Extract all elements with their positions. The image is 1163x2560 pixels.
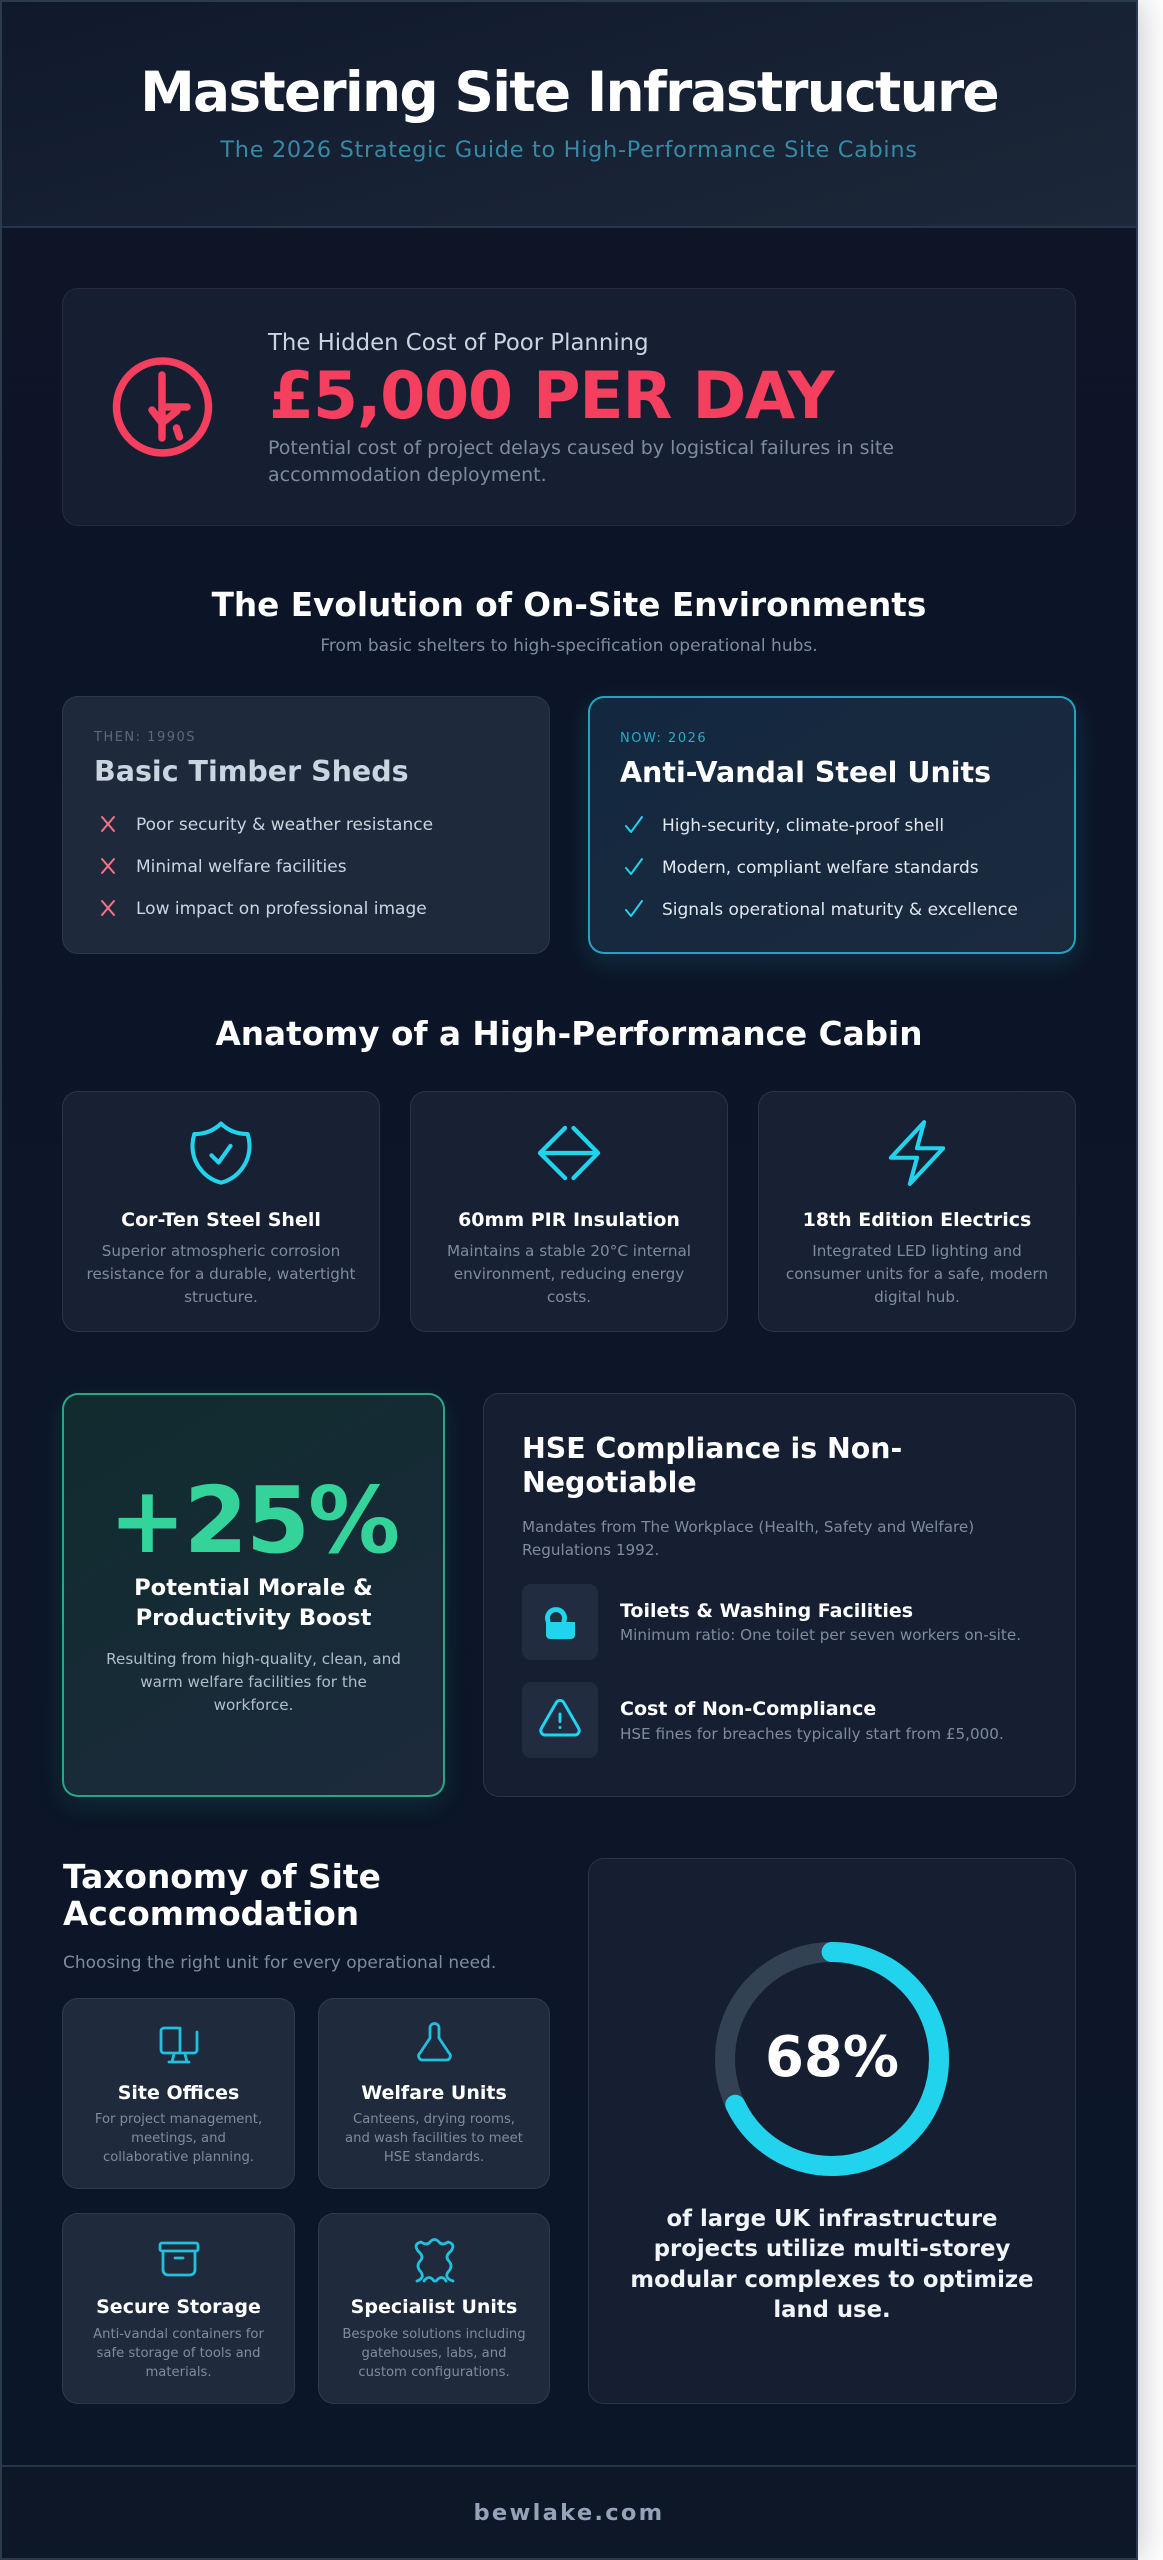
heading: HSE <box>522 1432 902 1499</box>
card text: collaborative planning. <box>103 2150 254 2165</box>
hero description <box>268 436 894 486</box>
card text: Anti-vandal containers for <box>93 2326 264 2342</box>
icon: basin <box>545 1607 575 1639</box>
icon: cross 1 <box>101 816 115 832</box>
heading: timber sheds: Basic Timber Sheds <box>94 755 409 788</box>
heading: taxonomy <box>63 1858 381 1932</box>
panel: multi-storey stat <box>588 1858 1076 2404</box>
panel: steel shell <box>62 1091 380 1332</box>
HSE description: Regulations 1992. <box>522 1540 659 1558</box>
item 3: Signals operational maturity & excellence <box>662 900 1018 920</box>
card text: Integrated LED lighting and <box>812 1242 1022 1260</box>
hero figure: £5,000 PER DAY <box>269 359 833 434</box>
item 1: Poor security & weather resistance <box>136 815 433 835</box>
card text: digital hub. <box>874 1288 960 1306</box>
heading: evolution: The Evolution of On-Site Environments <box>212 586 926 624</box>
card title: 18th Edition Electrics <box>803 1208 1031 1230</box>
HSE description: Mandates from The Workplace (Health, Safety and Welfare) <box>522 1518 974 1536</box>
icon: clock warning <box>112 357 212 457</box>
icon: shield <box>190 1121 252 1185</box>
footer brand: bewlake.com <box>473 2500 664 2526</box>
card text: Canteens, drying rooms, <box>353 2112 515 2127</box>
text: non-compliance title: Cost of Non-Compliance <box>620 1698 876 1720</box>
card: secure storage <box>62 2213 295 2404</box>
heading: anatomy: Anatomy of a High-Performance Cabin <box>215 1015 923 1053</box>
item 2: Modern, compliant welfare standards <box>662 858 979 878</box>
card text: meetings, and <box>131 2131 226 2146</box>
heading: steel units: Anti-Vandal Steel Units <box>620 756 991 788</box>
donut chart <box>715 1942 949 2176</box>
panel: electrics <box>758 1091 1076 1332</box>
card text <box>93 2326 264 2380</box>
card text: Maintains a stable 20°C internal <box>447 1242 691 1260</box>
stat description <box>106 1650 401 1714</box>
text: non-compliance detail: HSE fines for breaches typically start from £5,000. <box>620 1724 1004 1742</box>
card text: safe storage of tools and <box>97 2346 260 2360</box>
icon: storage box <box>158 2242 200 2276</box>
card: site offices <box>62 1998 295 2189</box>
list: now items <box>625 816 1018 920</box>
heading: HSE: HSE Compliance is Non- <box>522 1432 902 1464</box>
title: Mastering Site Infrastructure <box>140 60 998 124</box>
stat caption <box>630 2206 1034 2323</box>
card title: Site Offices <box>118 2082 239 2104</box>
icon: bolt <box>888 1120 946 1186</box>
card text: environment, reducing energy <box>454 1264 684 1282</box>
heading: HSE: Negotiable <box>522 1466 697 1499</box>
header band <box>2 2 1136 228</box>
stat caption: modular complexes to optimize <box>630 2266 1034 2292</box>
icon: check 1 <box>625 816 643 833</box>
card title: Cor-Ten Steel Shell <box>121 1208 321 1230</box>
card title: Welfare Units <box>361 2082 507 2104</box>
card text: materials. <box>145 2364 212 2380</box>
subheading: evolution: From basic shelters to high-specification operational hubs. <box>320 636 818 656</box>
heading: taxonomy: Taxonomy of Site <box>63 1858 381 1896</box>
icon: monitor <box>160 2026 198 2064</box>
panel: HSE compliance <box>483 1393 1076 1797</box>
card text: Bespoke solutions including <box>342 2326 526 2342</box>
icon: check 3 <box>625 900 643 917</box>
icon: split diamond <box>538 1126 600 1180</box>
panel: morale stat <box>62 1393 445 1797</box>
card text: resistance for a durable, watertight <box>87 1264 355 1282</box>
stat caption: land use. <box>773 2297 891 2323</box>
icon: check 2 <box>625 858 643 875</box>
stat figure: +25% <box>109 1467 398 1574</box>
donut value: 68% <box>765 2025 899 2090</box>
card text: Superior atmospheric corrosion <box>102 1242 340 1260</box>
card text <box>786 1242 1048 1306</box>
stat caption: Potential Morale & <box>134 1574 373 1600</box>
item 1: High-security, climate-proof shell <box>662 816 944 836</box>
card title: 60mm PIR Insulation <box>458 1208 680 1230</box>
card text: costs. <box>547 1288 591 1306</box>
card text: For project management, <box>95 2112 262 2127</box>
card text: consumer units for a safe, modern <box>786 1264 1048 1282</box>
panel: insulation <box>410 1091 728 1332</box>
subtitle: The 2026 Strategic Guide to High-Performance Site Cabins <box>220 137 918 163</box>
stat caption: projects utilize multi-storey <box>654 2236 1010 2262</box>
item 2: Minimal welfare facilities <box>136 857 347 877</box>
stat description: warm welfare facilities for the <box>140 1672 367 1690</box>
stat caption <box>134 1574 373 1631</box>
stat caption: Productivity Boost <box>136 1605 371 1631</box>
label: then: THEN: 1990S <box>94 730 196 745</box>
icon tile: non-compliance <box>522 1682 598 1758</box>
hero description: Potential cost of project delays caused by logistical failures in site <box>268 436 894 458</box>
card text <box>345 2112 523 2165</box>
card text: structure. <box>184 1288 258 1306</box>
card text: gatehouses, labs, and <box>362 2346 506 2360</box>
label: now: NOW: 2026 <box>620 731 707 746</box>
card text: HSE standards. <box>384 2150 484 2165</box>
icon: flask <box>417 2022 452 2062</box>
card text <box>342 2326 526 2380</box>
card text: and wash facilities to meet <box>345 2131 523 2146</box>
heading: taxonomy: Accommodation <box>63 1894 359 1932</box>
subheading: taxonomy: Choosing the right unit for every operational need. <box>63 1953 496 1973</box>
card text <box>447 1242 691 1306</box>
stat description: workforce. <box>214 1696 293 1714</box>
icon: hide outline <box>414 2238 454 2282</box>
hero label: The Hidden Cost of Poor Planning <box>268 330 649 356</box>
list: then items <box>101 815 433 919</box>
stat caption: of large UK infrastructure <box>666 2206 997 2232</box>
panel: hidden cost <box>62 288 1076 526</box>
card text: custom configurations. <box>358 2364 510 2380</box>
panel: then <box>62 696 550 954</box>
icon: cross 2 <box>101 858 115 874</box>
card title: Specialist Units <box>351 2296 517 2318</box>
panel: now <box>588 696 1076 954</box>
card title: Secure Storage <box>96 2296 261 2318</box>
item 3: Low impact on professional image <box>136 899 427 919</box>
text: toilets detail: Minimum ratio: One toilet per seven workers on-site. <box>620 1626 1021 1644</box>
text: toilets title: Toilets & Washing Facilities <box>620 1600 913 1622</box>
stat description: Resulting from high-quality, clean, and <box>106 1650 401 1668</box>
card: specialist units <box>318 2213 550 2404</box>
footer <box>2 2465 1136 2558</box>
card text <box>87 1242 356 1306</box>
icon tile: toilets <box>522 1584 598 1660</box>
card text <box>95 2112 262 2165</box>
icon: cross 3 <box>101 900 115 916</box>
hero description: accommodation deployment. <box>268 464 547 486</box>
HSE description <box>522 1518 974 1558</box>
icon: warning triangle <box>539 1699 581 1736</box>
card: welfare units <box>318 1998 550 2189</box>
